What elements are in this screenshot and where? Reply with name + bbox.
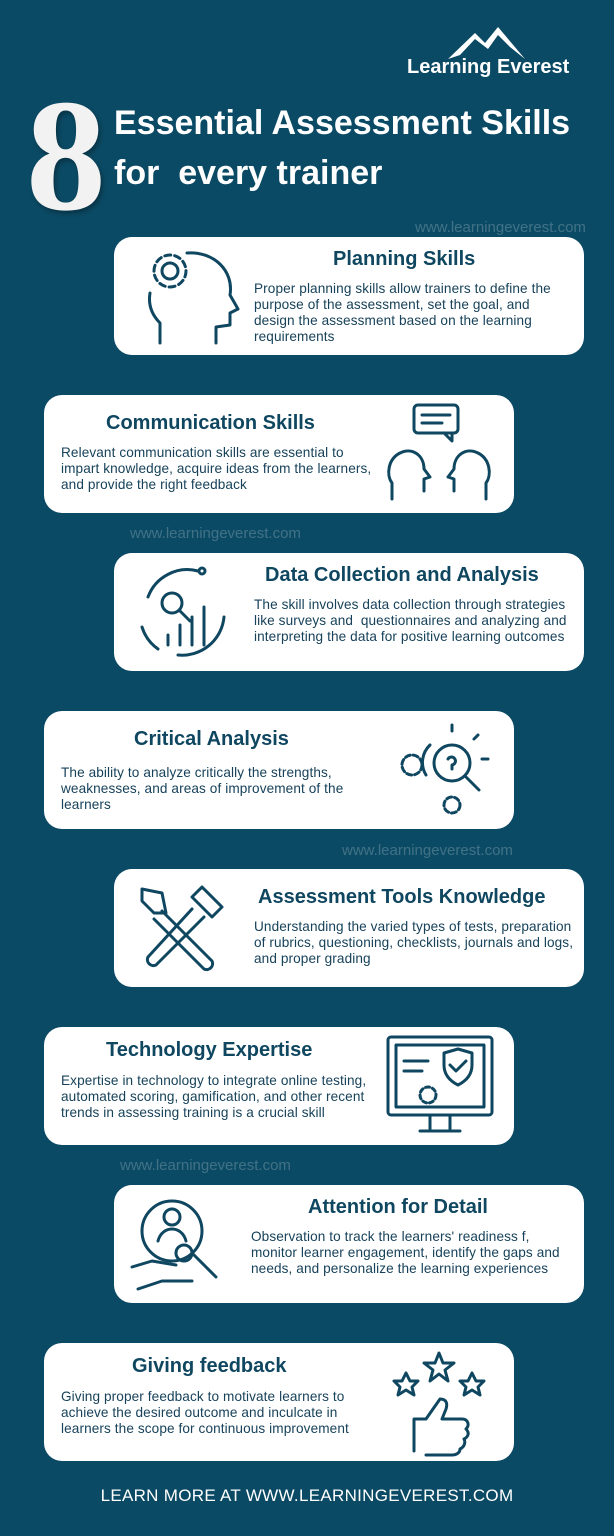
logo: Learning Everest: [407, 56, 569, 78]
watermark: www.learningeverest.com: [130, 525, 301, 542]
card: Data Collection and Analysis: The skill involves data collection through strategies like surveys and questionnaires and analyzing and interpreting the data for positive learning outcomes: [254, 597, 567, 644]
title: [114, 104, 570, 192]
card: Assessment Tools Knowledge: [114, 869, 584, 987]
card: Planning Skills: Planning Skills: [333, 248, 475, 270]
icon: head with gear: [148, 251, 240, 344]
card: Data Collection and Analysis: [114, 553, 584, 671]
card: Planning Skills: Proper planning skills allow trainers to define the purpose of the assessment, set the goal, and design the assessment based on the learning requirements: [254, 281, 551, 344]
watermark: www.learningeverest.com: [120, 1157, 291, 1174]
card: Attention for Detail: Attention for Detail: [308, 1196, 488, 1218]
title: Essential Assessment Skills: [114, 104, 570, 142]
card: Technology Expertise: Expertise in technology to integrate online testing, automated scoring, gamification, and other recent trends in assessing training is a crucial skill: [61, 1073, 366, 1120]
title: for every trainer: [114, 154, 382, 192]
watermark: www.learningeverest.com: [415, 219, 586, 236]
card: Communication Skills: [44, 395, 514, 513]
card: Assessment Tools Knowledge: Assessment Tools Knowledge: [258, 886, 545, 908]
card: Communication Skills: Communication Skills: [106, 412, 315, 434]
icon: hand holding magnifier with person: [130, 1200, 218, 1290]
card: Giving feedback: Giving proper feedback to motivate learners to achieve the desired outcome and inculcate in learners the scope for continuous improvement: [61, 1389, 349, 1436]
card: Critical Analysis: The ability to analyze critically the strengths, weaknesses, and areas of improvement of the learners: [61, 765, 343, 812]
card: Technology Expertise: Technology Expertise: [106, 1039, 312, 1061]
card: Attention for Detail: [114, 1185, 584, 1303]
footer: LEARN MORE AT WWW.LEARNINGEVEREST.COM: [101, 1486, 513, 1505]
card: Attention for Detail: Observation to track the learners' readiness f, monitor learner engagement, identify the gaps and needs, and personalize the learning experiences: [251, 1229, 560, 1276]
big number 8: 8: [26, 66, 106, 244]
card: Data Collection and Analysis: Data Collection and Analysis: [265, 564, 539, 586]
card: Assessment Tools Knowledge: Understanding the varied types of tests, preparation of rubrics, questioning, checklists, journals and logs, and proper grading: [254, 919, 573, 966]
card: Giving feedback: [44, 1343, 514, 1461]
icon: gears with magnifier: [400, 724, 490, 814]
card: Critical Analysis: Critical Analysis: [134, 728, 289, 750]
card: Technology Expertise: [44, 1027, 514, 1145]
card: Communication Skills: Relevant communication skills are essential to impart knowledge, acquire ideas from the learners, and provide the right feedback: [61, 445, 371, 492]
card: Giving feedback: Giving feedback: [132, 1355, 286, 1377]
icon: monitor with shield: [386, 1036, 494, 1132]
icon: data cycle: [140, 566, 226, 657]
watermark: www.learningeverest.com: [342, 842, 513, 859]
card: Critical Analysis: [44, 711, 514, 829]
icon: wrench and hammer: [140, 885, 224, 972]
card: Planning Skills: [114, 237, 584, 355]
logo: [407, 27, 570, 78]
icon: stars and thumbs up: [392, 1352, 486, 1456]
icon: two heads with chat: [387, 404, 491, 500]
